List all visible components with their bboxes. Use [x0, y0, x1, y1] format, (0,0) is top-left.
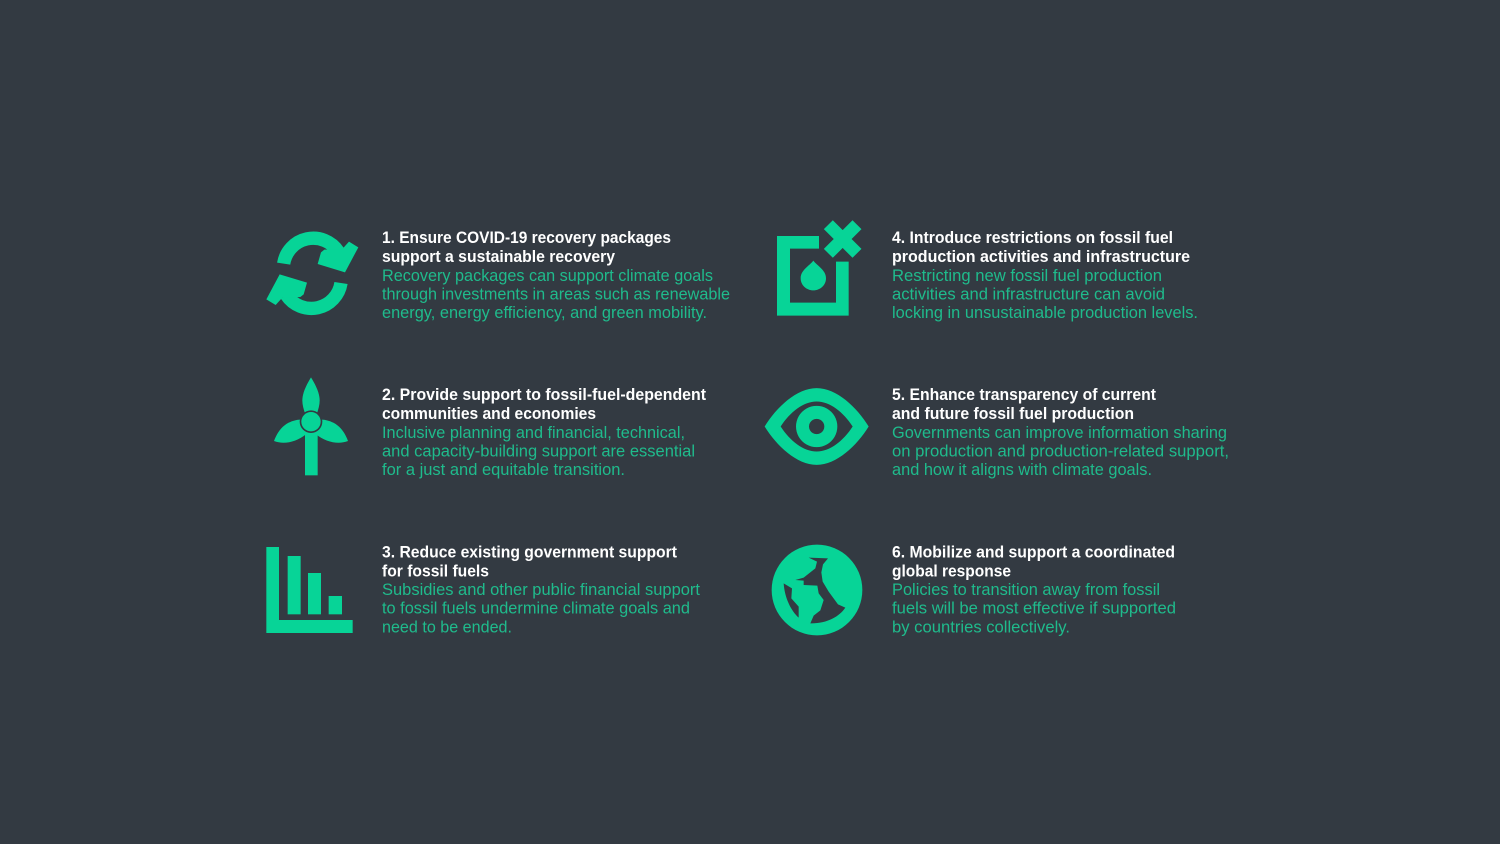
- text: action 1: support a sustainable recovery: [382, 247, 616, 266]
- text: action 3: for fossil fuels: [382, 562, 489, 580]
- text: action 2: 2. Provide support to fossil-fuel-dependent: [382, 385, 706, 404]
- text: action 5: on production and production-related support,: [892, 442, 1229, 460]
- text: action 6: Policies to transition away from fossil: [892, 580, 1160, 599]
- text: action 3: 3. Reduce existing government support: [382, 542, 677, 562]
- text: action 5: [892, 385, 1229, 479]
- icon: globe: [772, 545, 862, 635]
- icon: wind turbine: [274, 377, 348, 475]
- text: action 2: Inclusive planning and financial, technical,: [382, 423, 685, 442]
- text: action 2: [382, 385, 706, 479]
- icon: recycle arrows: [266, 238, 358, 308]
- text: action 1: energy, energy efficiency, and green mobility.: [382, 303, 707, 322]
- panel: action 4: [777, 225, 1198, 322]
- text: action 5: Governments can improve information sharing: [892, 423, 1227, 442]
- text: action 1: [382, 228, 730, 322]
- text: action 3: Subsidies and other public financial support: [382, 580, 700, 599]
- panel: action 5: [765, 385, 1229, 479]
- panel: action 6: [772, 542, 1176, 636]
- text: action 4: Restricting new fossil fuel production: [892, 266, 1162, 285]
- text: action 6: fuels will be most effective if supported: [892, 598, 1176, 618]
- panel: action 2: [274, 377, 706, 479]
- text: action 4: [892, 228, 1198, 322]
- text: action 3: need to be ended.: [382, 618, 512, 636]
- text: action 1: through investments in areas such as renewable: [382, 284, 730, 304]
- text: action 5: and how it aligns with climate goals.: [892, 460, 1152, 479]
- text: action 4: 4. Introduce restrictions on fossil fuel: [892, 228, 1173, 247]
- panel: action 1: [266, 228, 730, 322]
- icon: restricted oil drop: [777, 225, 857, 316]
- text: action 5: and future fossil fuel production: [892, 404, 1134, 423]
- icon: eye: [765, 388, 869, 465]
- text: action 4: production activities and infrastructure: [892, 247, 1190, 266]
- text: action 6: global response: [892, 562, 1011, 580]
- text: action 3: to fossil fuels undermine climate goals and: [382, 598, 690, 618]
- text: action 2: and capacity-building support are essential: [382, 442, 695, 460]
- text: action 2: communities and economies: [382, 404, 596, 423]
- text: action 1: Recovery packages can support climate goals: [382, 266, 713, 285]
- text: action 1: 1. Ensure COVID-19 recovery packages: [382, 228, 671, 247]
- text: action 6: 6. Mobilize and support a coordinated: [892, 542, 1175, 562]
- icon: bar chart: [266, 547, 353, 633]
- text: action 4: activities and infrastructure can avoid: [892, 284, 1165, 304]
- text: action 3: [382, 542, 700, 636]
- text: action 4: locking in unsustainable production levels.: [892, 303, 1198, 322]
- text: action 6: [892, 542, 1176, 636]
- text: action 5: 5. Enhance transparency of current: [892, 385, 1156, 404]
- text: action 2: for a just and equitable transition.: [382, 460, 625, 479]
- panel: action 3: [266, 542, 700, 636]
- text: action 6: by countries collectively.: [892, 618, 1070, 636]
